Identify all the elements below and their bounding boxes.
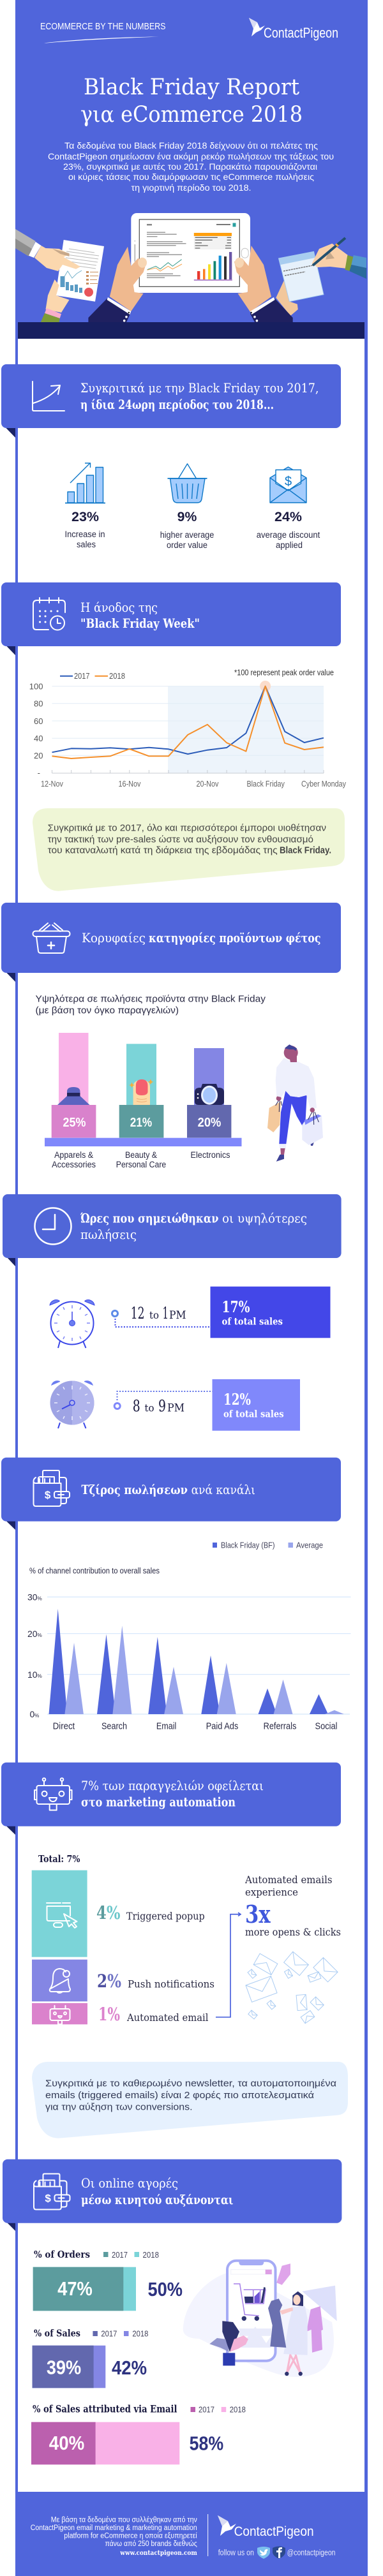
metric: % of orders bbox=[33, 2249, 183, 2311]
peak hour: 12 to 1PM bbox=[50, 1287, 331, 1348]
chart: top categories podium bbox=[45, 1033, 241, 1169]
bar: electronics: Electronics bbox=[190, 1150, 230, 1160]
triangles: Referrals bbox=[258, 1680, 292, 1714]
header text: Ώρες που σημειώθηκαν bbox=[80, 1211, 218, 1226]
bar: electronics: 20% bbox=[198, 1116, 222, 1130]
icon: envelope with dollar: $ bbox=[285, 475, 292, 489]
hero panel bbox=[15, 18, 366, 339]
legend: channel chart bbox=[213, 1541, 323, 1550]
label and legend bbox=[34, 2249, 159, 2260]
x axis labels: Cyber Monday bbox=[301, 779, 346, 788]
label and legend: 2017 bbox=[199, 2406, 214, 2415]
time label: PM bbox=[167, 1402, 184, 1415]
icon: wallet bbox=[34, 2174, 70, 2210]
channel labels: Search bbox=[101, 1721, 127, 1731]
callout: pre-sales: Συγκριτικά με το 2017, όλο και περισσότεροι έμποροι υιοθέτησαν bbox=[48, 823, 326, 834]
illustration: shopper with bags bbox=[267, 1044, 323, 1162]
icon: basket bbox=[167, 464, 207, 503]
icon: bell bbox=[50, 1969, 70, 1993]
footer bbox=[31, 2514, 336, 2559]
header text bbox=[82, 931, 320, 945]
right hands with notepad bbox=[278, 238, 366, 302]
stat: 23% increase in sales: 23% bbox=[71, 510, 99, 524]
bar: 40% bbox=[49, 2432, 84, 2454]
bar: beauty: Personal Care bbox=[116, 1160, 166, 1169]
triangles: Paid Ads bbox=[201, 1655, 236, 1714]
x axis labels: Black Friday bbox=[246, 779, 285, 788]
intro text bbox=[48, 140, 334, 193]
x axis labels: 12-Nov bbox=[41, 779, 63, 788]
eyebrow label bbox=[40, 22, 166, 43]
time label: 12 bbox=[131, 1304, 144, 1322]
time label: to bbox=[144, 1402, 154, 1414]
subheading: top products bbox=[36, 994, 266, 1016]
social links bbox=[218, 2547, 336, 2559]
section header: revenue by channel bbox=[1, 1458, 341, 1530]
stat: 24% average discount applied: applied bbox=[276, 540, 303, 550]
y axis labels: 40 bbox=[34, 734, 43, 743]
y axis labels: 80 bbox=[34, 699, 43, 708]
icon: shopping basket plus bbox=[33, 923, 70, 953]
icon: alarm clock filled bbox=[50, 1381, 94, 1428]
row: push notifications 2% bbox=[32, 1960, 214, 2001]
social links: follow us on bbox=[218, 2548, 254, 2557]
stat: 23% increase in sales: sales bbox=[77, 540, 96, 549]
channel labels: Social bbox=[315, 1721, 337, 1731]
legend: 2018 bbox=[109, 671, 125, 681]
row: automated email 1%: Automated email bbox=[126, 2011, 208, 2024]
channel labels: Paid Ads bbox=[206, 1721, 238, 1731]
intro text: ContactPigeon σημείωσαν ένα ακόμη ρεκόρ πωλήσεων της τάξεως του bbox=[48, 151, 334, 161]
intro text: 23%, συγκριτικά με αυτές του 2017. Παρακάτω παρουσιάζονται bbox=[63, 161, 317, 172]
section header: top categories bbox=[1, 903, 341, 982]
logo: ContactPigeon bbox=[249, 18, 338, 41]
callout: pre-sales: Black Friday. bbox=[280, 845, 331, 856]
header text bbox=[80, 600, 200, 631]
icon: wallet: $ bbox=[45, 1489, 51, 1501]
source note: Με βάση τα δεδομένα που συλλέχθηκαν από την bbox=[51, 2517, 197, 2524]
bar: apparels: Accessories bbox=[52, 1160, 96, 1169]
stat: automated emails experience 3x bbox=[244, 1874, 341, 1938]
axis labels: 10% bbox=[27, 1669, 42, 1680]
bar: apparels: Apparels & bbox=[54, 1150, 93, 1160]
section header: mobile purchases bbox=[3, 2159, 342, 2231]
label and legend: % of Sales attributed via Email bbox=[33, 2403, 177, 2415]
header text: Κορυφαίες bbox=[82, 931, 146, 945]
metric: % of sales: 42% bbox=[112, 2357, 147, 2379]
icon: calendar with clock bbox=[33, 598, 65, 630]
bar: beauty: Beauty & bbox=[125, 1150, 157, 1160]
section header: Black Friday Week bbox=[1, 582, 341, 655]
x axis labels bbox=[41, 779, 346, 788]
desk bar bbox=[18, 322, 364, 339]
intro text: οι κύριες τάσεις που διαμόρφωσαν τις eCommerce πωλήσεις bbox=[68, 172, 314, 182]
time label: to bbox=[149, 1309, 159, 1321]
triangles: Direct bbox=[49, 1609, 84, 1714]
icon: wallet bbox=[33, 1470, 70, 1506]
chart: channel contribution triangles bbox=[27, 1592, 351, 1731]
line chart: order value by day bbox=[29, 669, 346, 788]
logo: ContactPigeon: ContactPigeon bbox=[264, 25, 338, 41]
stat: 23% increase in sales bbox=[65, 463, 105, 549]
header text: κατηγορίες προϊόντων φέτος bbox=[149, 931, 320, 945]
icon: growth chart bbox=[33, 381, 64, 411]
callout: triggered emails: για την αύξηση των conversions. bbox=[45, 2102, 193, 2113]
right lower hand behind notepad bbox=[276, 281, 298, 316]
icon: robot bbox=[34, 1778, 71, 1810]
header text: Οι online αγορές bbox=[81, 2176, 178, 2191]
tablet bbox=[131, 213, 250, 293]
logo: ContactPigeon footer: ContactPigeon bbox=[234, 2524, 314, 2539]
callout: pre-sales: του καταναλωτή κατά τη διάρκεια της εβδομάδας της bbox=[48, 845, 278, 856]
icon: hat bbox=[57, 1087, 89, 1105]
header text: "Black Friday Week" bbox=[80, 616, 200, 631]
header text bbox=[81, 2176, 234, 2207]
source note: www.contactpigeon.com bbox=[119, 2549, 197, 2557]
bar bbox=[33, 2267, 136, 2311]
stat: 9% higher average order value: 9% bbox=[177, 510, 197, 524]
bar bbox=[32, 2346, 105, 2388]
channel labels: Direct bbox=[53, 1721, 75, 1731]
section header: peak hours bbox=[3, 1194, 342, 1266]
bar bbox=[31, 2422, 179, 2464]
stat: automated emails experience 3x: 3x bbox=[245, 1900, 271, 1928]
share box bbox=[212, 1379, 300, 1431]
label and legend bbox=[34, 2328, 148, 2339]
y axis labels: 20 bbox=[34, 751, 43, 760]
channel labels bbox=[53, 1721, 338, 1731]
y axis labels: 60 bbox=[34, 716, 43, 726]
header text: οι υψηλότερες bbox=[222, 1211, 307, 1226]
illustration: hands holding tablet and reports bbox=[15, 213, 366, 339]
eyebrow label: ECOMMERCE BY THE NUMBERS bbox=[40, 22, 166, 32]
share box: 12% bbox=[223, 1390, 251, 1409]
icon: clock bbox=[34, 1208, 71, 1244]
chart subtitle: % of channel contribution to overall sales bbox=[29, 1567, 160, 1576]
icon: twitter bbox=[257, 2547, 270, 2559]
y axis labels bbox=[29, 681, 43, 778]
label and legend: 2017 bbox=[112, 2251, 128, 2260]
icon: popup cursor bbox=[47, 1903, 77, 1928]
icon: wallet: $ bbox=[45, 2192, 51, 2205]
header text: μέσω κινητού αυξάνονται bbox=[81, 2193, 234, 2207]
stat: 9% higher average order value bbox=[160, 464, 214, 550]
series 2017 bbox=[52, 686, 324, 754]
axis labels: 30% bbox=[27, 1592, 42, 1603]
stat: 9% higher average order value: order value bbox=[167, 540, 207, 550]
x axis labels: 20-Nov bbox=[197, 779, 219, 788]
icon: camera bbox=[195, 1084, 224, 1105]
icon: rising bars bbox=[65, 463, 105, 503]
series 2018 bbox=[52, 686, 324, 759]
time label: 9 bbox=[158, 1397, 166, 1416]
phone bbox=[227, 2260, 276, 2361]
axis labels: 20% bbox=[27, 1629, 42, 1639]
metric: % of sales bbox=[32, 2328, 148, 2388]
stacked blocks: automation share bbox=[32, 1870, 214, 2025]
woman with clothes bbox=[268, 2291, 323, 2376]
time label bbox=[133, 1397, 184, 1416]
bar chart on tablet bbox=[194, 252, 232, 281]
plant bbox=[209, 2321, 248, 2365]
source note: ContactPigeon email marketing & marketing automation bbox=[31, 2524, 197, 2532]
triangles: Search bbox=[97, 1625, 131, 1714]
title: για eCommerce 2018 bbox=[80, 102, 303, 128]
stat: automated emails experience 3x: experience bbox=[245, 1886, 298, 1899]
note: *100 represent peak order value bbox=[234, 669, 334, 677]
stat: 24% average discount applied bbox=[257, 467, 320, 550]
callout: triggered emails: Συγκριτικά με το καθιερωμένο newsletter, τα αυτοματοποιημένα bbox=[45, 2078, 336, 2089]
legend: channel chart: Black Friday (BF) bbox=[221, 1541, 274, 1550]
share box: of total sales bbox=[223, 1409, 284, 1420]
row: triggered popup 4%: Triggered popup bbox=[126, 1910, 205, 1922]
stat: 24% average discount applied: 24% bbox=[274, 510, 302, 524]
label and legend: 2017 bbox=[101, 2330, 117, 2339]
share box: of total sales bbox=[222, 1316, 283, 1328]
time label: 8 bbox=[133, 1397, 140, 1416]
bar: 39% bbox=[47, 2357, 81, 2379]
stat: automated emails experience 3x: more opens & clicks bbox=[245, 1926, 341, 1938]
illustration: mobile shopping bbox=[183, 2260, 337, 2377]
header text: Η άνοδος της bbox=[80, 600, 158, 615]
label and legend: 2018 bbox=[132, 2330, 148, 2339]
section header: marketing automation bbox=[1, 1763, 341, 1835]
metric: % of orders: 50% bbox=[148, 2278, 183, 2300]
label and legend: % of Sales bbox=[34, 2328, 80, 2339]
channel labels: Referrals bbox=[264, 1721, 296, 1731]
triangles: Email bbox=[148, 1637, 183, 1714]
bar: beauty: 21% bbox=[130, 1116, 152, 1130]
title bbox=[80, 75, 303, 128]
intro text: τη γιορτινή περίοδο του 2018. bbox=[131, 182, 252, 193]
y axis labels: 100 bbox=[29, 681, 43, 692]
connector bbox=[112, 1310, 211, 1327]
bar: 47% bbox=[57, 2277, 93, 2300]
bar: electronics bbox=[187, 1048, 231, 1160]
row: automated email 1%: 1% bbox=[98, 2004, 120, 2025]
subheading: top products: Υψηλότερα σε πωλήσεις προϊόντα στην Black Friday bbox=[36, 994, 266, 1005]
source note: platform for eCommerce η οποία εξυπηρετεί bbox=[64, 2532, 197, 2540]
header text bbox=[80, 1211, 307, 1242]
triangles: Social bbox=[310, 1694, 344, 1714]
time label: 1 bbox=[162, 1304, 169, 1322]
cart bbox=[234, 2284, 266, 2321]
row: push notifications 2%: Push notifications bbox=[128, 1978, 214, 1990]
stat: automated emails experience 3x: Automated emails bbox=[244, 1874, 332, 1886]
stat: 9% higher average order value: higher average bbox=[160, 530, 214, 540]
intro text: Τα δεδομένα του Black Friday 2018 δείχνουν ότι οι πελάτες της bbox=[64, 140, 318, 151]
share box bbox=[211, 1287, 331, 1338]
bar: apparels bbox=[52, 1033, 96, 1169]
bar: apparels: 25% bbox=[63, 1116, 86, 1130]
header text bbox=[81, 1779, 264, 1810]
connector bbox=[114, 1391, 212, 1409]
header text bbox=[80, 381, 319, 412]
header text: Συγκριτικά με την Black Friday του 2017, bbox=[80, 381, 319, 396]
header text: πωλήσεις bbox=[80, 1227, 137, 1242]
time label bbox=[131, 1304, 186, 1322]
left hands with report bbox=[15, 229, 104, 322]
header text: Τζίρος πωλήσεων bbox=[81, 1483, 188, 1497]
section header: comparison with 2017 bbox=[1, 364, 341, 438]
total label: Total: 7% bbox=[38, 1853, 80, 1865]
icon: robot small bbox=[50, 2006, 70, 2024]
hands holding tablet bbox=[88, 246, 293, 322]
icon: painted nail bbox=[129, 1079, 153, 1105]
legend bbox=[60, 671, 125, 681]
axis labels: 0% bbox=[29, 1709, 39, 1719]
source note bbox=[31, 2517, 197, 2557]
channel labels: Email bbox=[156, 1721, 176, 1731]
row: automated email 1% bbox=[32, 2003, 208, 2025]
x axis labels: 16-Nov bbox=[119, 779, 141, 788]
header text: στο marketing automation bbox=[81, 1795, 236, 1810]
y axis labels: - bbox=[38, 768, 40, 778]
share box: 17% bbox=[222, 1298, 250, 1316]
legend: channel chart: Average bbox=[296, 1541, 323, 1550]
axis labels bbox=[27, 1592, 42, 1719]
arrow: automated email to 3x bbox=[216, 1913, 241, 2017]
callout: pre-sales: την τακτική των pre-sales ώστε να αυξήσουν τον ενθουσιασμό bbox=[48, 834, 313, 845]
stat: 24% average discount applied: average discount bbox=[257, 530, 320, 540]
title: Black Friday Report bbox=[84, 75, 299, 100]
label and legend: % of Orders bbox=[34, 2249, 90, 2260]
callout: pre-sales bbox=[33, 808, 345, 891]
callout: triggered emails: emails (triggered emails) είναι 2 φορές πιο αποτελεσματικά bbox=[45, 2090, 314, 2101]
icon: facebook bbox=[273, 2547, 285, 2559]
callout: triggered emails bbox=[32, 2062, 348, 2138]
icon: alarm clock bbox=[50, 1300, 94, 1348]
row: triggered popup 4%: 4% bbox=[96, 1902, 120, 1923]
stat: 23% increase in sales: Increase in bbox=[65, 529, 105, 539]
row: triggered popup 4% bbox=[32, 1870, 205, 1957]
legend: 2017 bbox=[74, 671, 89, 681]
peak hour: 8 to 9PM bbox=[50, 1379, 300, 1431]
subheading: top products: (με βάση τον όγκο παραγγελιών) bbox=[36, 1005, 179, 1016]
social links: @contactpigeon bbox=[287, 2548, 336, 2557]
stats row bbox=[65, 463, 320, 550]
label and legend: 2018 bbox=[143, 2251, 159, 2260]
header text: η ίδια 24ωρη περίοδος του 2018... bbox=[80, 397, 274, 412]
bar: beauty bbox=[116, 1044, 166, 1169]
header text: 7% των παραγγελιών οφείλεται bbox=[81, 1779, 264, 1793]
header text: ανά κανάλι bbox=[192, 1483, 255, 1497]
metric: % of sales via email bbox=[31, 2403, 246, 2464]
source note: πάνω από 250 brands διεθνώς bbox=[105, 2540, 197, 2548]
illustration: flying envelopes bbox=[246, 1951, 338, 2024]
row: push notifications 2%: 2% bbox=[97, 1971, 121, 1992]
logo: ContactPigeon footer bbox=[218, 2515, 314, 2539]
metric: % of sales via email: 58% bbox=[190, 2432, 223, 2455]
time label: PM bbox=[169, 1309, 186, 1322]
label and legend: 2018 bbox=[230, 2406, 246, 2415]
